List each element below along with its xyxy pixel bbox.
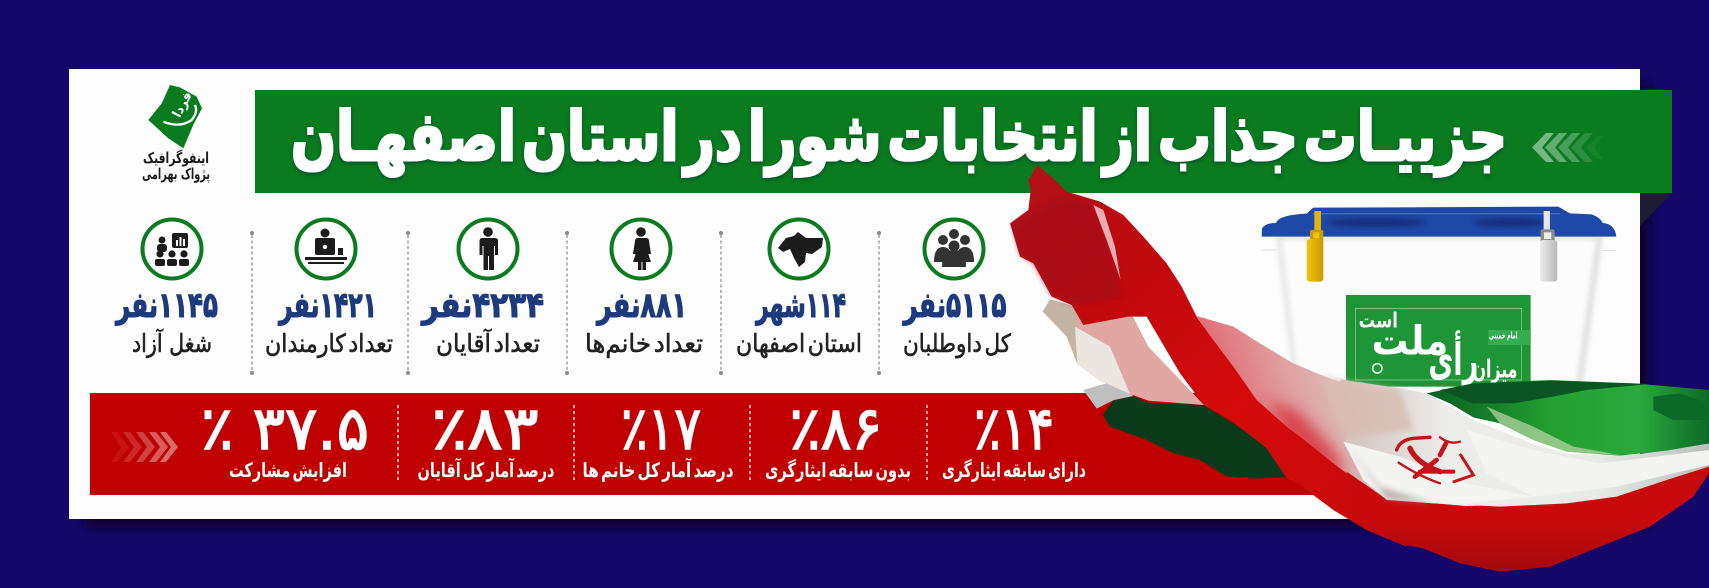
sticker: است	[1359, 309, 1398, 334]
number: ۴۲۳۴نفر	[420, 286, 544, 326]
main flag wave	[1320, 377, 1709, 572]
ribbon highlight	[1093, 205, 1121, 280]
stat: cities	[736, 220, 862, 359]
icon: logo emblem: فردا	[169, 89, 195, 120]
blue gap	[1084, 301, 1106, 321]
yellow seal	[1307, 211, 1323, 282]
number: ۱۴۲۱نفر	[278, 286, 377, 326]
label: کل داوطلبان	[903, 329, 1011, 359]
dark ribbon shade	[1013, 197, 1122, 305]
logo: Farda	[142, 85, 210, 184]
logo caption	[142, 149, 210, 184]
stat: women	[585, 220, 703, 359]
stats row dividers	[250, 231, 881, 375]
stat: total candidates	[902, 220, 1011, 359]
box body	[1262, 237, 1616, 392]
flag back part and ribbon	[1010, 165, 1420, 547]
red ribbon	[1010, 165, 1407, 547]
sticker: رأی	[1428, 330, 1478, 386]
stat: freelance	[115, 220, 218, 358]
stat: 14 percent: ٪۱۴	[974, 394, 1054, 464]
label: استان اصفهان	[736, 329, 862, 359]
icon: self-employed group	[142, 220, 202, 278]
number: ۱۱۴۵نفر	[115, 286, 218, 326]
dark green fold	[1103, 396, 1286, 479]
stat: 37.5 percent: افزایش مشارکت	[229, 458, 347, 482]
title banner	[255, 90, 1672, 193]
stat: 83 percent: ٪۸۳	[432, 394, 538, 464]
emblem	[1397, 437, 1473, 483]
blended fold shade	[1320, 377, 1413, 438]
illustration: ballot box	[1262, 207, 1616, 392]
panel shadow	[84, 82, 1672, 528]
green stripe	[1427, 380, 1709, 456]
label: تعداد کارمندان	[265, 329, 393, 358]
label: تعداد آقایان	[436, 328, 540, 358]
stat: 14 percent	[942, 394, 1086, 482]
lower fold shade	[1347, 443, 1433, 503]
label: شغل آزاد	[132, 328, 212, 358]
icon: Isfahan province map	[770, 220, 828, 278]
pink stripe	[1197, 316, 1420, 497]
number: ۸۸۱نفر	[596, 286, 687, 326]
icon: employee at laptop	[296, 220, 356, 278]
stat: 17 percent	[582, 394, 734, 482]
stat: 83 percent: درصد آمار کل آقایان	[418, 457, 554, 482]
torn white edge	[1083, 381, 1133, 409]
sticker: ملت	[1372, 318, 1448, 364]
pink stripe red stain	[1267, 400, 1347, 477]
sticker: امام خمینی	[1489, 330, 1517, 341]
dividers	[398, 405, 927, 480]
stat: 17 percent: ٪۱۷	[621, 394, 701, 464]
sticker	[1346, 295, 1531, 387]
stat: 86 percent: ٪۸۶	[790, 394, 882, 464]
white stripe	[1340, 379, 1709, 507]
white panel	[69, 69, 1640, 519]
stat: men	[420, 220, 544, 358]
icon: red chevrons	[111, 432, 178, 462]
logo caption: اینفوگرافیک	[143, 149, 209, 167]
icon: man	[458, 220, 518, 278]
number: ۱۱۴شهر	[755, 286, 846, 326]
illustration: waving Iranian flag	[1010, 165, 1709, 572]
box lid	[1262, 207, 1616, 237]
stat: 86 percent	[765, 394, 911, 482]
stat: 83 percent	[418, 394, 554, 482]
stat: 17 percent: درصد آمار کل خانم ها	[582, 457, 734, 482]
logo caption: پژواک بهرامی	[142, 165, 210, 184]
stat: 37.5 percent: ٪ ۳۷.۵	[201, 394, 369, 464]
panel: percentages red bar	[90, 393, 1350, 495]
sticker: میزان	[1472, 354, 1517, 385]
grey seal	[1540, 211, 1557, 282]
number: ۵۱۱۵نفر	[902, 286, 1006, 326]
label: تعداد خانم‌ها	[585, 329, 703, 359]
red stripe	[1347, 466, 1709, 572]
icon: crowd	[924, 220, 984, 278]
stat: employees	[265, 220, 393, 358]
icon: woman	[612, 220, 670, 278]
pink translucent fold	[1043, 299, 1204, 405]
stat: 14 percent: دارای سابقه ایثارگری	[942, 458, 1086, 482]
icon: banner chevrons	[1532, 133, 1603, 162]
stat: 86 percent: بدون سابقه ایثارگری	[765, 458, 911, 482]
